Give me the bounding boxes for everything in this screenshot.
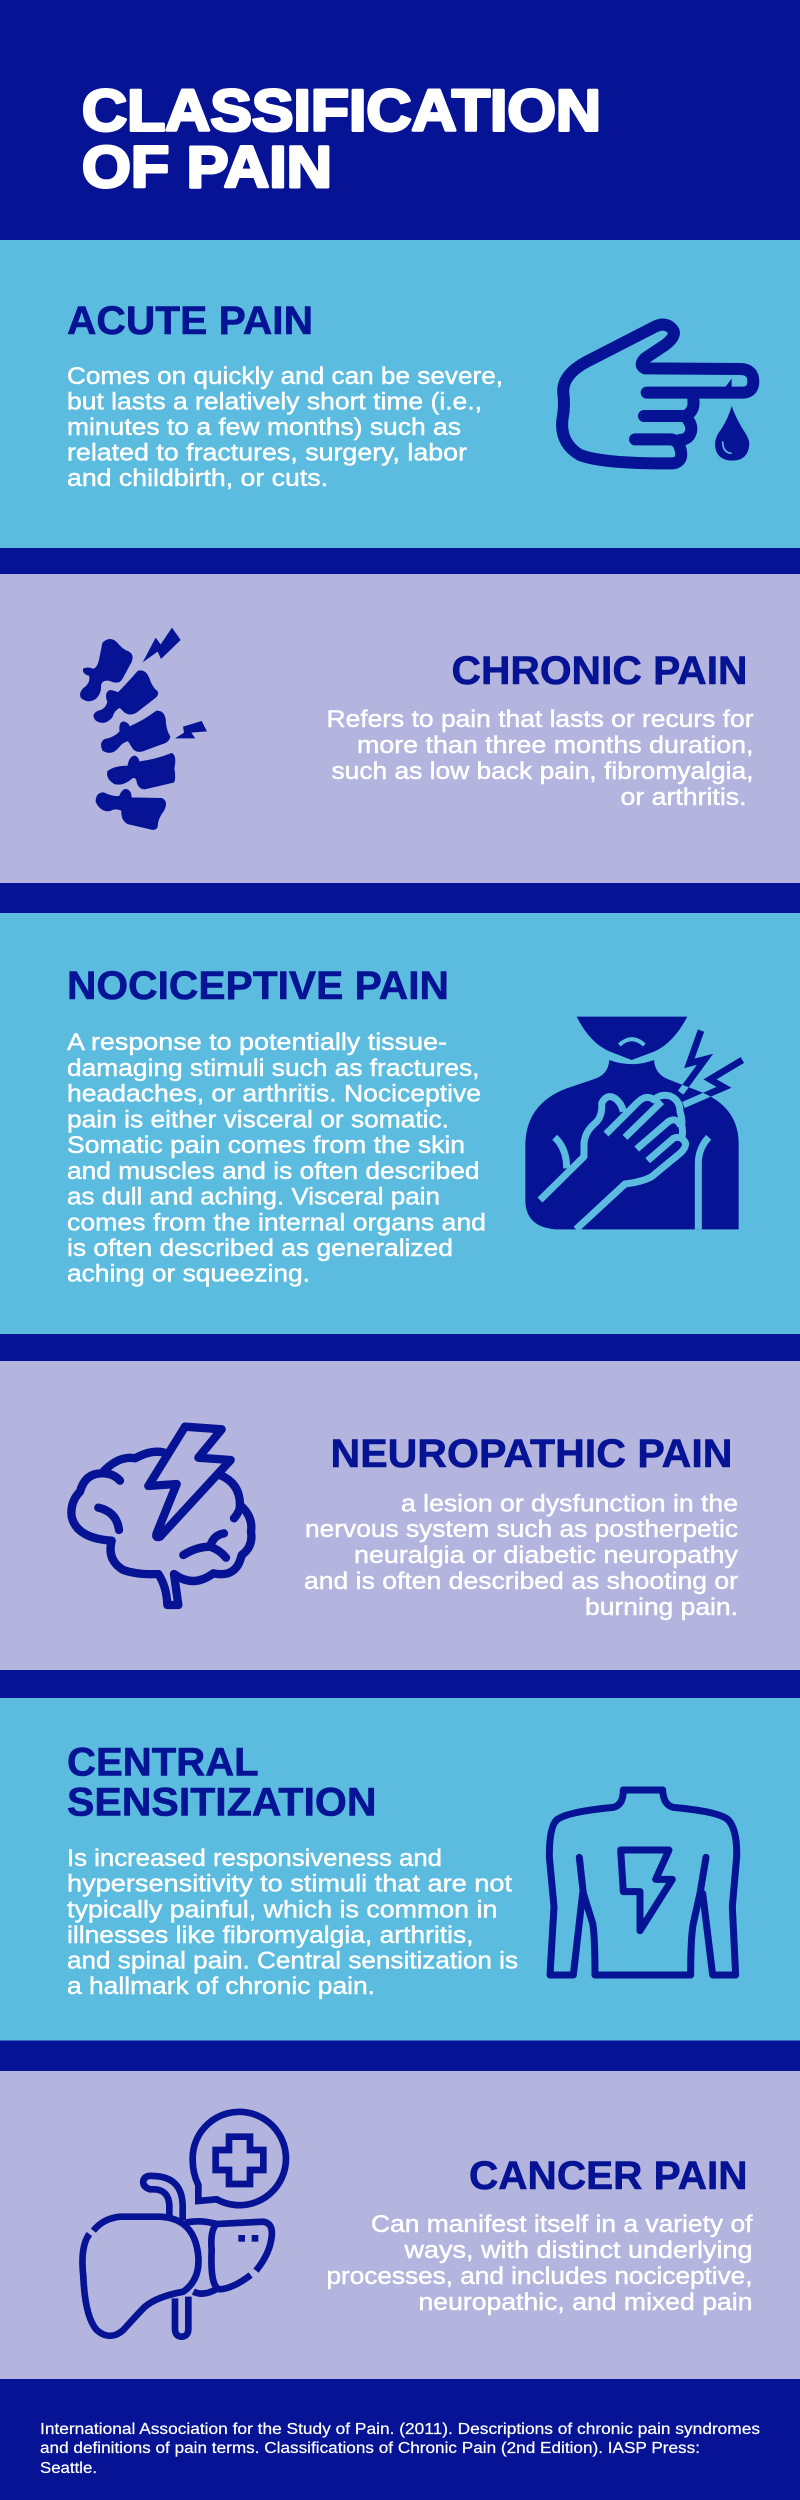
text: cancer pain description: ways, with distinct underlying bbox=[403, 2237, 752, 2264]
heading: cancer pain: CANCER PAIN bbox=[469, 2154, 748, 2198]
text: acute pain description: and childbirth, or cuts. bbox=[67, 465, 328, 492]
liver bbox=[82, 2176, 272, 2337]
text: chronic pain description: Refers to pain that lasts or recurs for bbox=[326, 706, 754, 733]
text: central sensitization description: typically painful, which is common in bbox=[67, 1896, 497, 1923]
footer citation: and definitions of pain terms. Classifications of Chronic Pain (2nd Edition). IASP Press: bbox=[40, 2440, 700, 2457]
footer citation: International Association for the Study of Pain. (2011). Descriptions of chronic pain syndromes bbox=[40, 2421, 760, 2438]
text: nociceptive pain description: and muscles and is often described bbox=[67, 1158, 480, 1185]
text: central sensitization description bbox=[67, 1845, 518, 2000]
text: central sensitization description: a hallmark of chronic pain. bbox=[67, 1973, 375, 2000]
speech bubble with cross bbox=[193, 2112, 286, 2205]
text: central sensitization description: and spinal pain. Central sensitization is bbox=[67, 1948, 518, 1974]
footer citation: Seattle. bbox=[40, 2460, 97, 2477]
title bbox=[82, 78, 601, 200]
title: CLASSIFICATION bbox=[82, 78, 601, 144]
heading: neuropathic pain: NEUROPATHIC PAIN bbox=[330, 1432, 732, 1476]
text: acute pain description: Comes on quickly and can be severe, bbox=[67, 363, 503, 390]
icon: liver with medical cross speech bubble bbox=[82, 2112, 286, 2337]
heading: chronic pain: CHRONIC PAIN bbox=[452, 649, 748, 693]
text: nociceptive pain description: A response to potentially tissue- bbox=[67, 1029, 447, 1056]
title: OF PAIN bbox=[82, 135, 332, 200]
panel: nociceptive pain bbox=[0, 913, 800, 1334]
heading: central sensitization: SENSITIZATION bbox=[67, 1780, 376, 1824]
text: chronic pain description: or arthritis. bbox=[620, 784, 746, 811]
text: nociceptive pain description: is often described as generalized bbox=[67, 1235, 453, 1262]
text: chronic pain description: more than three months duration, bbox=[357, 732, 754, 759]
text: nociceptive pain description bbox=[67, 1029, 486, 1288]
text: nociceptive pain description: comes from the internal organs and bbox=[67, 1210, 486, 1236]
text: nociceptive pain description: aching or squeezing. bbox=[67, 1260, 310, 1288]
icon: spine with lightning bolts bbox=[81, 628, 207, 829]
icon: person holding painful shoulder bbox=[525, 1017, 742, 1229]
icon: brain with lightning bolt bbox=[71, 1427, 251, 1605]
icon: pointing hand with blood drop bbox=[562, 325, 753, 463]
icon: torso with lightning bolt bbox=[549, 1790, 737, 1975]
text: cancer pain description bbox=[326, 2211, 753, 2316]
text: nociceptive pain description: as dull and aching. Visceral pain bbox=[67, 1184, 440, 1210]
panel: chronic pain bbox=[0, 574, 800, 883]
text: chronic pain description bbox=[326, 706, 754, 811]
text: central sensitization description: Is increased responsiveness and bbox=[67, 1845, 442, 1872]
text: acute pain description: related to fractures, surgery, labor bbox=[67, 440, 467, 466]
text: chronic pain description: such as low back pain, fibromyalgia, bbox=[332, 758, 754, 785]
heading: nociceptive pain: NOCICEPTIVE PAIN bbox=[67, 964, 449, 1008]
text: acute pain description: minutes to a few months) such as bbox=[67, 414, 461, 441]
text: acute pain description: but lasts a relatively short time (i.e., bbox=[67, 388, 482, 416]
text: nociceptive pain description: pain is either visceral or somatic. bbox=[67, 1106, 449, 1133]
text: neuropathic pain description: burning pain. bbox=[585, 1594, 738, 1621]
text: neuropathic pain description: neuralgia or diabetic neuropathy bbox=[354, 1542, 738, 1569]
text: acute pain description bbox=[67, 363, 503, 492]
text: nociceptive pain description: damaging stimuli such as fractures, bbox=[67, 1055, 480, 1082]
heading: central sensitization bbox=[67, 1741, 376, 1824]
panel: neuropathic pain bbox=[0, 1361, 800, 1670]
text: cancer pain description: Can manifest itself in a variety of bbox=[371, 2211, 753, 2238]
text: nociceptive pain description: Somatic pain comes from the skin bbox=[67, 1132, 465, 1159]
text: neuropathic pain description: nervous system such as postherpetic bbox=[305, 1516, 738, 1543]
text: cancer pain description: processes, and includes nociceptive, bbox=[326, 2263, 752, 2290]
text: cancer pain description: neuropathic, and mixed pain bbox=[418, 2289, 752, 2316]
text: neuropathic pain description bbox=[304, 1490, 738, 1621]
panel: acute pain bbox=[0, 240, 800, 548]
heading: acute pain: ACUTE PAIN bbox=[67, 299, 313, 343]
panel: central sensitization bbox=[0, 1698, 800, 2040]
text: central sensitization description: illnesses like fibromyalgia, arthritis, bbox=[67, 1922, 473, 1949]
text: neuropathic pain description: and is often described as shooting or bbox=[304, 1568, 738, 1595]
text: neuropathic pain description: a lesion or dysfunction in the bbox=[401, 1490, 738, 1518]
text: nociceptive pain description: headaches, or arthritis. Nociceptive bbox=[67, 1080, 481, 1108]
heading: central sensitization: CENTRAL bbox=[67, 1741, 259, 1785]
footer citation bbox=[40, 2421, 760, 2477]
panel: cancer pain bbox=[0, 2071, 800, 2379]
text: central sensitization description: hypersensitivity to stimuli that are not bbox=[67, 1871, 512, 1898]
